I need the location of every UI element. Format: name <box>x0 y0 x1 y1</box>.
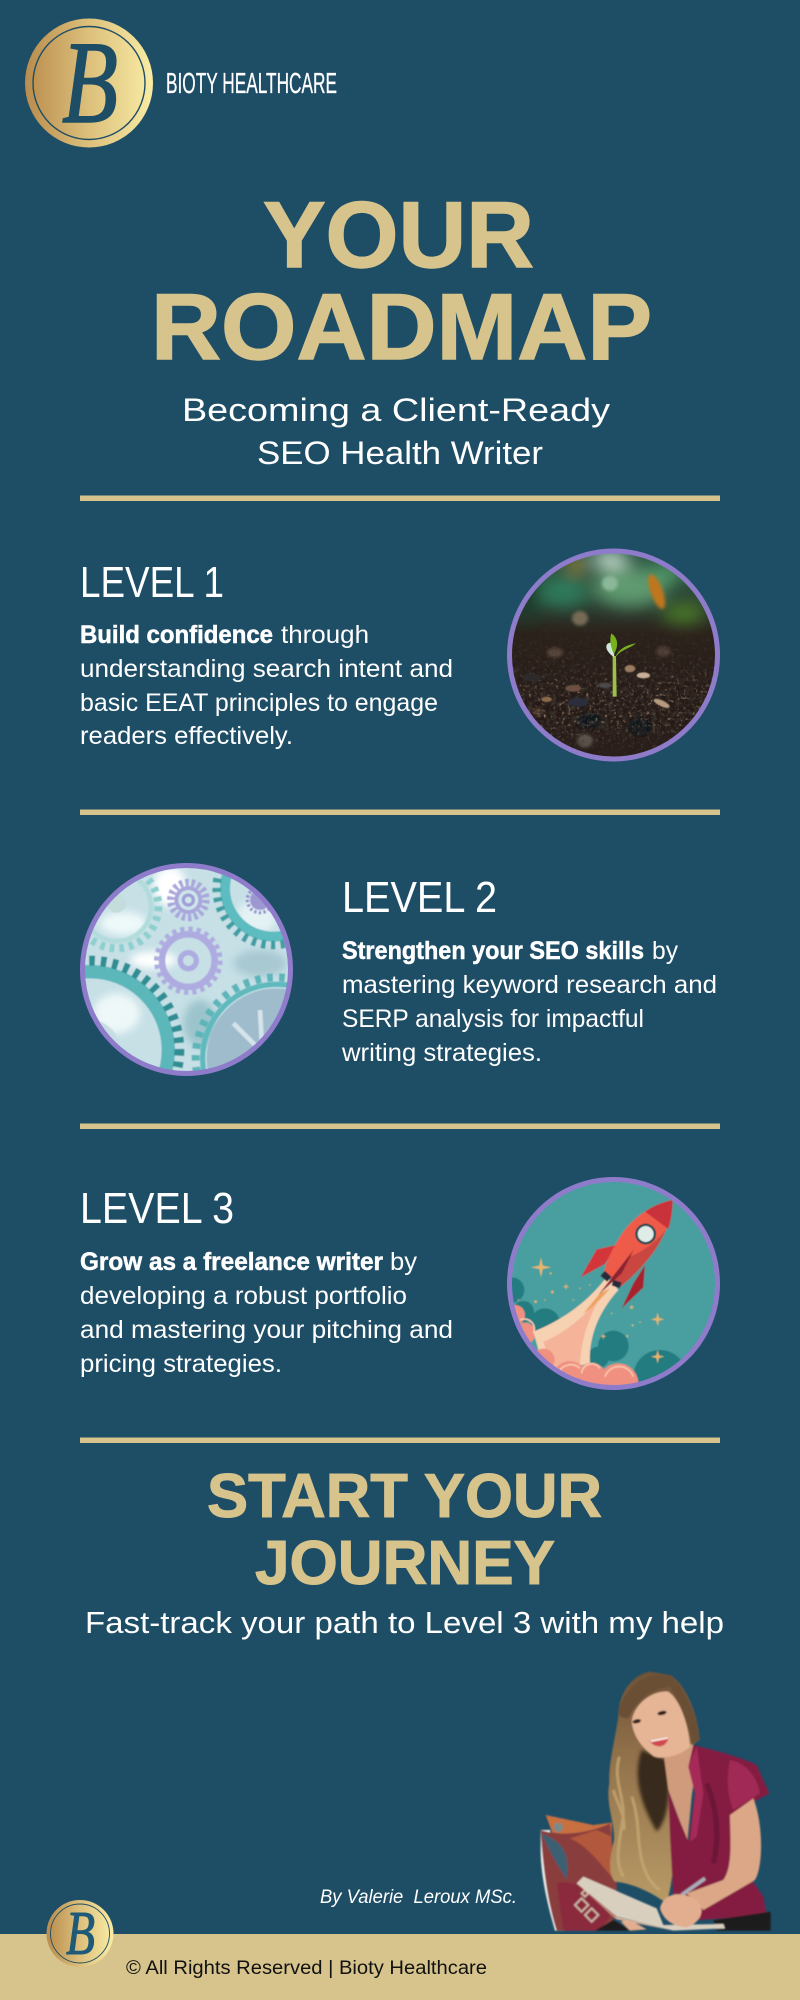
hair mass <box>608 1672 699 1903</box>
byline: By Valerie Leroux MSc. <box>320 1887 517 1908</box>
image: seedling in soil <box>507 547 720 763</box>
level 3 description <box>80 1248 453 1378</box>
title: YOUR <box>263 182 534 287</box>
logo: gold B badge <box>25 17 153 148</box>
face <box>632 1692 690 1758</box>
level 3 description: pricing strategies. <box>80 1350 282 1378</box>
level 1 heading: LEVEL 1 <box>80 558 224 607</box>
level 3 description: Grow as a freelance writer <box>80 1248 383 1276</box>
level 2 description <box>341 937 717 1067</box>
level 2 heading: LEVEL 2 <box>342 873 497 922</box>
heading: start your journey: START YOUR <box>207 1462 602 1531</box>
level 3 description: developing a robust portfolio <box>80 1282 407 1310</box>
panel: level 1 <box>80 547 720 763</box>
level 1 description: understanding search intent and <box>80 655 453 683</box>
level 2 description: Strengthen your SEO skills <box>342 937 644 965</box>
level 1 description: basic EEAT principles to engage <box>80 689 438 717</box>
blouse <box>668 1745 769 1920</box>
subtitle <box>182 392 610 471</box>
footer band <box>0 1934 800 2000</box>
pale gear <box>92 879 154 944</box>
level 1 description: readers effectively. <box>80 722 293 750</box>
level 1 description: Build confidence <box>80 621 273 649</box>
level 3 heading: LEVEL 3 <box>80 1184 234 1233</box>
footer logo <box>46 1900 114 1968</box>
neck and chest <box>663 1743 697 1842</box>
heading: start your journey: JOURNEY <box>255 1529 555 1598</box>
purple gear large <box>162 934 215 987</box>
level 3 description: and mastering your pitching and <box>80 1316 453 1344</box>
subtitle: SEO Health Writer <box>257 435 543 471</box>
panel: level 2 <box>80 863 716 1076</box>
level 3 description: by <box>390 1248 418 1276</box>
brand name: BIOTY HEALTHCARE <box>166 68 337 100</box>
bottom-right gear <box>207 988 347 1128</box>
heading: start your journey <box>207 1462 602 1598</box>
copyright: © All Rights Reserved | Bioty Healthcare <box>126 1958 487 1979</box>
level 1 description <box>80 621 453 750</box>
panel: level 3 <box>80 1173 723 1403</box>
level 2 description: mastering keyword research and <box>342 971 717 999</box>
title <box>151 182 652 379</box>
title: ROADMAP <box>151 274 652 379</box>
subtitle: Becoming a Client-Ready <box>182 392 610 428</box>
image: gears <box>80 863 293 1076</box>
level 2 description: writing strategies. <box>341 1039 542 1067</box>
purple gear small <box>171 882 206 918</box>
logo: gold B badge: B <box>62 17 118 148</box>
level 2 description: SERP analysis for impactful <box>342 1005 644 1033</box>
image: rocket launch <box>507 1177 720 1390</box>
photo: author with notebook and pillows <box>541 1672 771 1931</box>
top-right gear <box>220 874 284 942</box>
footer logo: B <box>66 1900 95 1968</box>
bottom-left gear <box>100 1022 116 1036</box>
call to action line: Fast-track your path to Level 3 with my help <box>85 1605 724 1640</box>
level 2 description: by <box>652 937 678 965</box>
level 1 description: through <box>281 621 369 649</box>
